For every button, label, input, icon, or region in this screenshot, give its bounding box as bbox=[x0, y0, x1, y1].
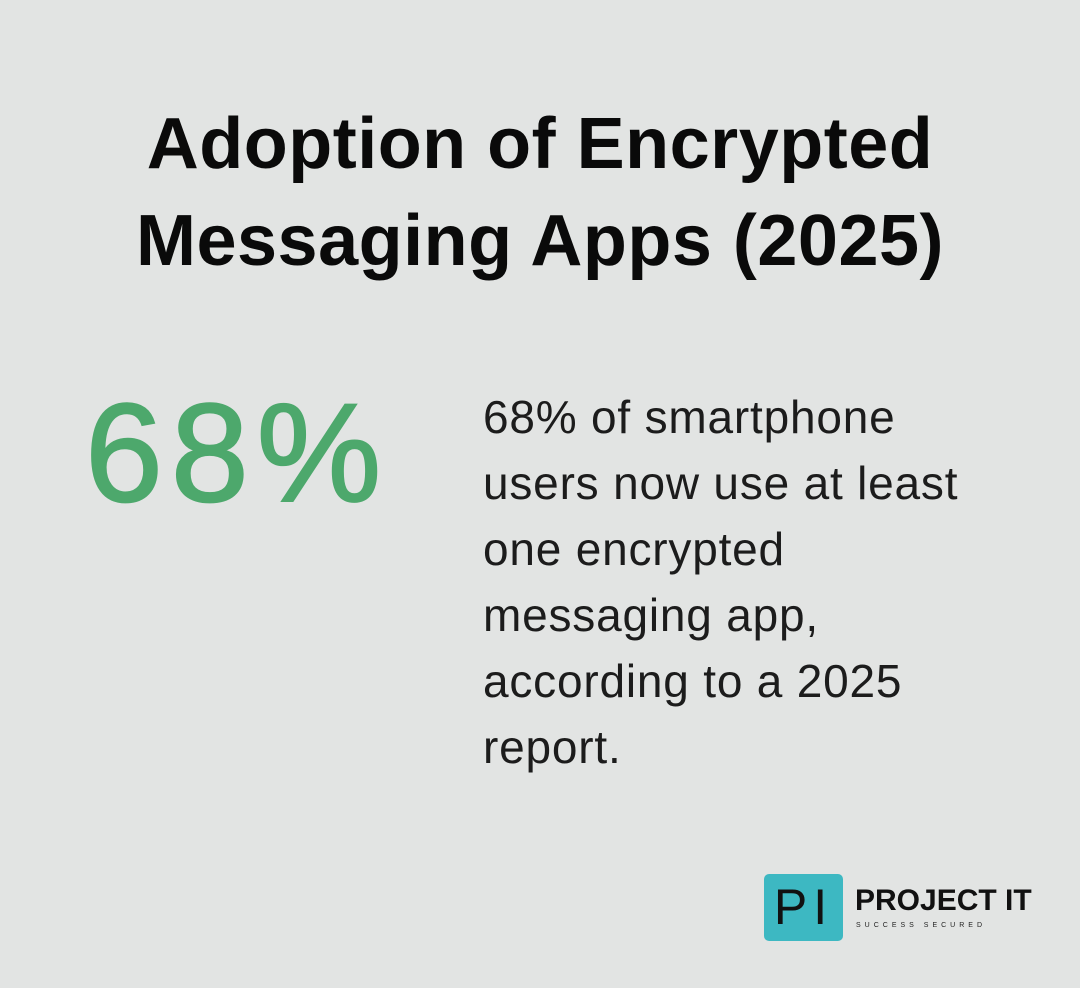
title: Messaging Apps (2025) bbox=[136, 201, 944, 281]
description text: report. bbox=[483, 721, 622, 773]
title bbox=[136, 104, 944, 281]
description text: messaging app, bbox=[483, 589, 819, 641]
logo tagline: SUCCESS SECURED bbox=[856, 922, 986, 929]
logo icon bbox=[764, 874, 843, 941]
logo bbox=[764, 874, 1032, 941]
description text: one encrypted bbox=[483, 523, 785, 575]
title: Adoption of Encrypted bbox=[147, 104, 933, 184]
big stat: 68% bbox=[85, 374, 389, 531]
description text: users now use at least bbox=[483, 457, 958, 509]
description text: 68% of smartphone bbox=[483, 391, 896, 443]
description text: according to a 2025 bbox=[483, 655, 902, 707]
description text bbox=[483, 391, 958, 773]
logo icon: PI bbox=[774, 879, 833, 935]
logo name: PROJECT IT bbox=[855, 884, 1032, 917]
